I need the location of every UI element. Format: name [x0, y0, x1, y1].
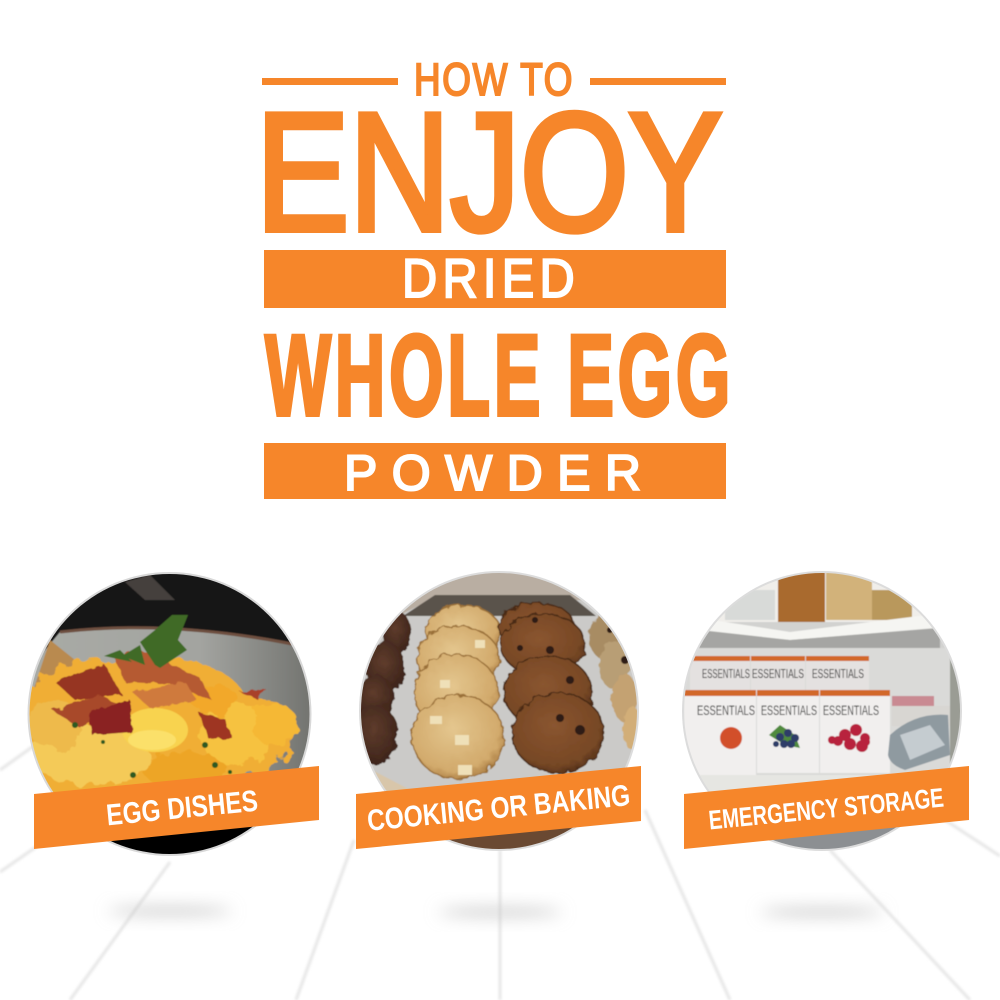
photo circle: scrambled eggs	[20, 570, 320, 860]
banner: cooking or baking	[356, 766, 641, 849]
panel: emergency storage	[680, 570, 970, 860]
cans: ESSENTIALS	[812, 666, 864, 681]
heading: enjoy: ENJOY	[256, 78, 722, 266]
banner: powder	[264, 443, 726, 501]
cans: ESSENTIALS	[823, 702, 879, 718]
banner: powder: POWDER	[344, 445, 641, 501]
photo circle: cookies	[350, 570, 650, 860]
panel: cooking or baking	[350, 570, 650, 860]
cans: ESSENTIALS	[761, 702, 817, 718]
cans: ESSENTIALS	[752, 666, 804, 681]
photo circle: pantry shelf	[680, 570, 970, 860]
heading: how to with side rules	[262, 54, 726, 105]
title block	[256, 54, 734, 501]
banner: cooking or baking: COOKING OR BAKING	[366, 779, 632, 838]
heading: how to with side rules: HOW TO	[414, 54, 574, 105]
banner: dried: DRIED	[402, 247, 580, 309]
cans: ESSENTIALS	[697, 702, 755, 718]
cans	[684, 656, 890, 775]
banner: dried	[264, 247, 726, 309]
cans: ESSENTIALS	[702, 666, 750, 681]
panel: egg dishes	[20, 570, 320, 860]
banner: egg dishes	[34, 766, 319, 849]
glass jar	[888, 696, 950, 770]
banner: emergency storage	[684, 766, 969, 849]
banner: egg dishes: EGG DISHES	[105, 785, 259, 832]
